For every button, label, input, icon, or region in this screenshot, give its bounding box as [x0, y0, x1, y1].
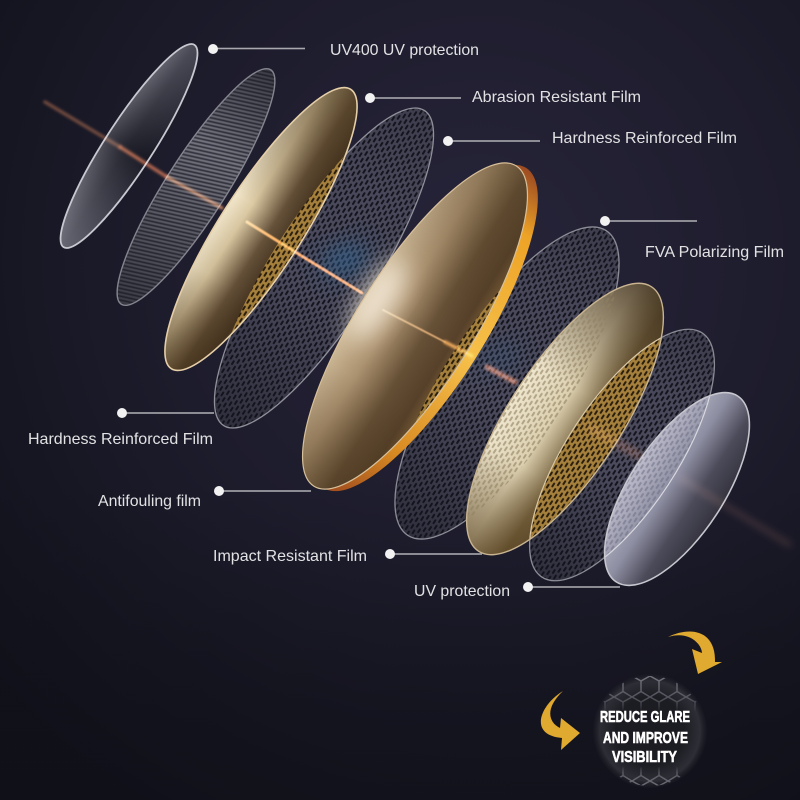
- label: Impact Resistant Film: Impact Resistant Film: [213, 548, 367, 565]
- badge: reduce glare and improve visibility: REDUCE GLARE: [600, 709, 690, 726]
- lens layer 1: UV400 UV protection: [43, 32, 215, 260]
- label: Hardness Reinforced Film (left): Hardness Reinforced Film: [28, 431, 213, 448]
- lens layer 6: FVA polarizing mesh film: [356, 197, 658, 569]
- label: UV protection: [414, 582, 620, 600]
- icon: top curved gold arrow: [668, 631, 722, 674]
- label: UV400 UV protection: [208, 42, 479, 59]
- lens layer 2: abrasion resistant film: [96, 54, 296, 320]
- lens layer 7: pale gold lens: [466, 282, 664, 556]
- label: Hardness Reinforced Film (top): Hardness Reinforced Film: [552, 130, 737, 147]
- badge: reduce glare and improve visibility: VISIBILITY: [612, 749, 677, 766]
- label: UV protection: UV protection: [414, 583, 510, 600]
- label: Hardness Reinforced Film (top): [443, 130, 737, 147]
- label: FVA Polarizing Film: FVA Polarizing Film: [645, 244, 784, 261]
- badge: reduce glare and improve visibility: AND IMPROVE: [603, 730, 688, 747]
- label: UV400 UV protection: UV400 UV protection: [330, 42, 479, 59]
- label: FVA Polarizing Film: [600, 216, 784, 261]
- label: Abrasion Resistant Film: [365, 89, 641, 106]
- lens layer 3: gold tinted lens: [164, 86, 358, 372]
- lens layer 9: gray UV protection lens: [604, 392, 750, 586]
- light streak across lenses: [45, 102, 790, 545]
- label: Hardness Reinforced Film (left): [28, 408, 214, 448]
- label: Antifouling film: [98, 486, 311, 510]
- label: Impact Resistant Film: [213, 548, 482, 565]
- label: Abrasion Resistant Film: Abrasion Resistant Film: [472, 89, 641, 106]
- lens layer 8: mesh film: [496, 303, 748, 607]
- label: Antifouling film: Antifouling film: [98, 493, 201, 510]
- icon: left curved gold arrow: [541, 691, 580, 750]
- lens layer 5: central lens with gold rim: [302, 162, 538, 492]
- lens layer 4: hardness reinforced mesh film: [180, 83, 468, 453]
- badge: reduce glare and improve visibility: [593, 674, 707, 788]
